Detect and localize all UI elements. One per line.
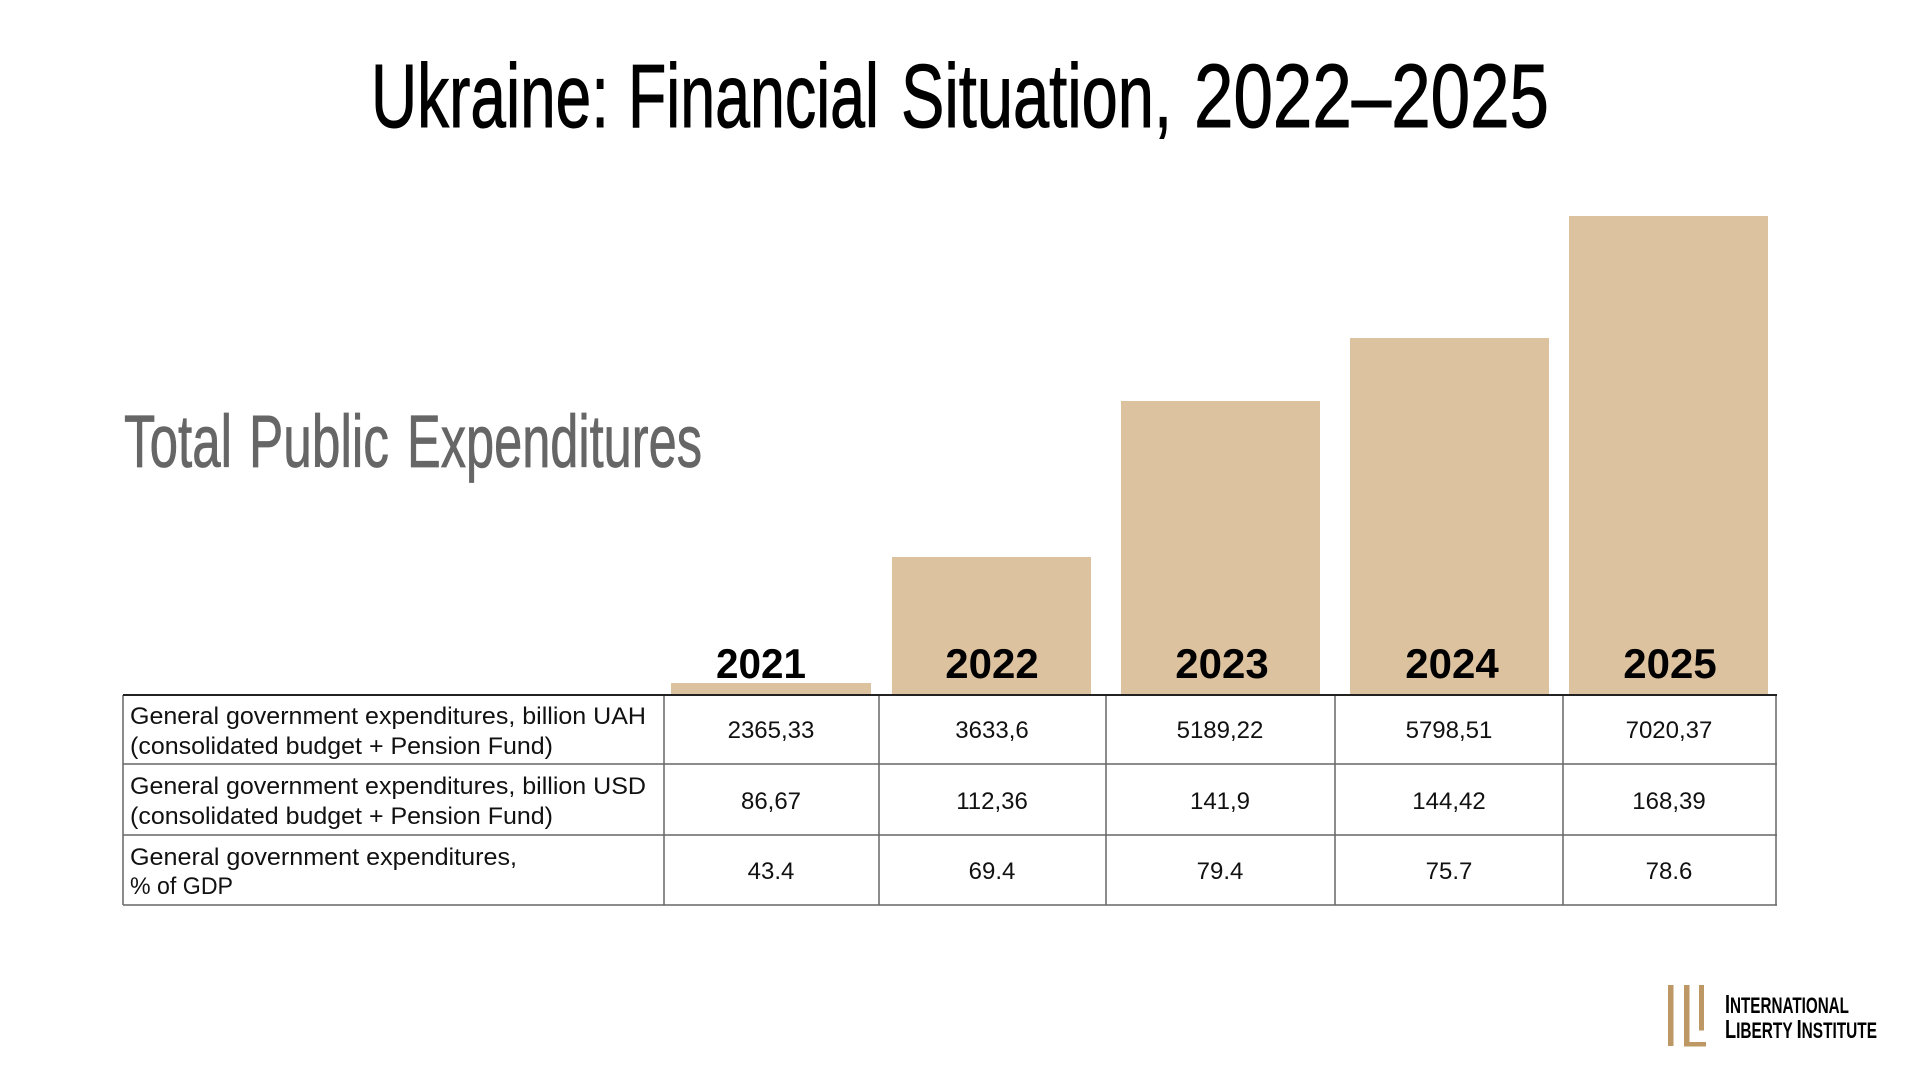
row 3 label	[130, 844, 517, 900]
logo mark	[1668, 985, 1706, 1046]
title: Financial	[628, 47, 879, 147]
bar chart	[671, 216, 1768, 694]
row 2 values: 144,42	[1412, 788, 1486, 815]
bar 2021	[671, 683, 871, 694]
logo wordmark	[1725, 989, 1877, 1044]
row 2 values: 141,9	[1190, 788, 1250, 815]
row 1 values: 5189,22	[1177, 717, 1263, 744]
label 2024: 2024	[1405, 640, 1499, 687]
row 2 values	[741, 788, 1706, 815]
logo: International Liberty Institute	[1668, 985, 1877, 1046]
label 2023: 2023	[1175, 640, 1269, 687]
table grid	[123, 695, 1777, 905]
title: Situation,	[901, 47, 1172, 147]
heading: total public expenditures: Public	[249, 400, 389, 483]
heading: total public expenditures	[124, 400, 702, 483]
label 2021: 2021	[716, 640, 806, 687]
row 2 values: 86,67	[741, 788, 801, 815]
row 3 values: 75.7	[1426, 858, 1472, 885]
bar 2024	[1350, 338, 1549, 694]
bar 2023	[1121, 401, 1320, 694]
logo wordmark: INTERNATIONAL	[1725, 989, 1849, 1019]
title	[371, 47, 1549, 147]
title: Ukraine:	[371, 47, 609, 147]
row 3 values: 69.4	[969, 858, 1015, 885]
data table	[123, 695, 1777, 905]
label 2025: 2025	[1623, 640, 1717, 687]
row 3 label: % of GDP	[130, 873, 233, 900]
heading: total public expenditures: Total	[124, 400, 232, 483]
row 2 values: 112,36	[956, 788, 1028, 815]
row 1 values: 5798,51	[1406, 717, 1492, 744]
row 1 label: (consolidated budget + Pension Fund)	[130, 733, 553, 760]
row 2 label: (consolidated budget + Pension Fund)	[130, 803, 553, 830]
row 1 label	[130, 703, 646, 760]
row 3 label: General government expenditures,	[130, 844, 517, 871]
row 1 label: General government expenditures, billion UAH	[130, 703, 646, 730]
row 2 values: 168,39	[1632, 788, 1706, 815]
row 3 values	[748, 858, 1692, 885]
logo wordmark: LIBERTY INSTITUTE	[1725, 1014, 1877, 1044]
bar 2022	[892, 557, 1091, 694]
row 2 label: General government expenditures, billion USD	[130, 773, 646, 800]
row 3 values: 78.6	[1646, 858, 1692, 885]
row 1 values: 3633,6	[955, 717, 1029, 744]
row 2 label	[130, 773, 646, 830]
row 1 values	[728, 717, 1712, 744]
row 1 values: 7020,37	[1626, 717, 1712, 744]
label 2022: 2022	[945, 640, 1039, 687]
bar 2025	[1569, 216, 1768, 694]
heading: total public expenditures: Expenditures	[407, 400, 702, 483]
title: 2022–2025	[1194, 47, 1549, 147]
row 1 values: 2365,33	[728, 717, 814, 744]
row 3 values: 43.4	[748, 858, 794, 885]
row 3 values: 79.4	[1197, 858, 1243, 885]
